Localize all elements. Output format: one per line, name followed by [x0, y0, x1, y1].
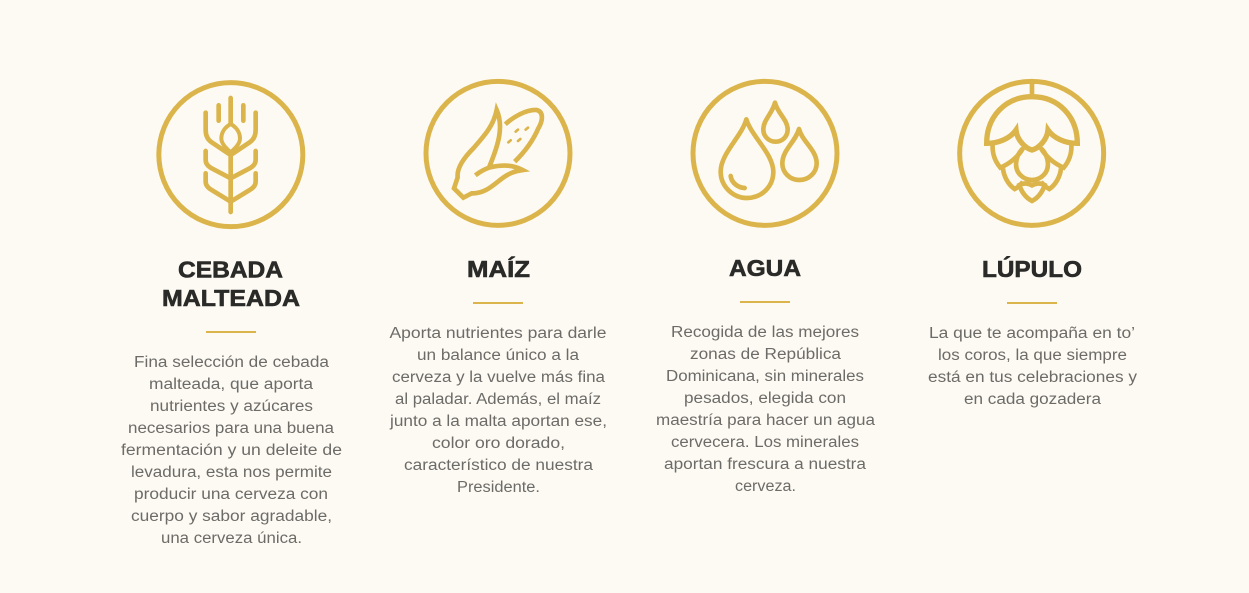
text block: cebada description: cuerpo y sabor agradable, [131, 508, 332, 525]
text block: cebada description: producir una cerveza con [134, 486, 328, 503]
panel: lupulo [928, 81, 1137, 408]
text block: agua description: cervecera. Los minerales [671, 434, 859, 451]
text block: cebada description: Fina selección de cebada [134, 354, 329, 371]
text block: lupulo description: está en tus celebraciones y [928, 369, 1137, 386]
text block: maiz description: al paladar. Además, el maíz [395, 391, 601, 408]
text block: agua description: aportan frescura a nuestra [664, 456, 866, 473]
heading: maiz: MAÍZ [467, 255, 530, 282]
icon: hop [960, 81, 1104, 225]
text block: agua description: Dominicana, sin minerales [666, 368, 864, 385]
text block: cebada description: nutrientes y azúcares [150, 398, 313, 415]
text block: cebada description: una cerveza única. [161, 530, 302, 547]
icon: water drops [693, 81, 837, 225]
panel: cebada malteada [121, 83, 342, 547]
text block: lupulo description: los coros, la que siempre [938, 347, 1127, 364]
panel: maiz [389, 81, 607, 496]
text block: maiz description: un balance único a la [417, 347, 579, 364]
text block: maiz description: Aporta nutrientes para darle [390, 325, 606, 342]
heading: cebada malteada: MALTEADA [162, 285, 300, 311]
text block: agua description: Recogida de las mejores [671, 324, 859, 341]
text block: maiz description: característico de nuestra [404, 457, 593, 474]
text block: maiz description: Presidente. [457, 479, 540, 496]
panel: agua [656, 81, 875, 495]
text block: maiz description: cerveza y la vuelve más fina [392, 369, 605, 386]
heading rule [1007, 302, 1057, 304]
text block: maiz description: junto a la malta aportan ese, [389, 413, 607, 430]
heading rule [473, 302, 523, 304]
icon: wheat [159, 83, 303, 227]
text block: cebada description: necesarios para una buena [128, 420, 334, 437]
text block: cebada description: levadura, esta nos permite [131, 464, 332, 481]
text block: lupulo description: en cada gozadera [964, 391, 1101, 408]
text block: maiz description: color oro dorado, [432, 435, 565, 452]
text block: agua description: pesados, elegida con [684, 390, 846, 407]
heading: lupulo: LÚPULO [982, 255, 1082, 282]
heading: cebada malteada [162, 256, 300, 311]
text block: lupulo description: La que te acompaña en to’ [929, 325, 1135, 342]
text block: lupulo description [928, 325, 1137, 408]
text block: agua description: zonas de República [690, 346, 841, 363]
heading: cebada malteada: CEBADA [178, 256, 283, 282]
text block: cebada description: fermentación y un deleite de [121, 442, 342, 459]
text block: cebada description: malteada, que aporta [149, 376, 313, 393]
heading rule [740, 301, 790, 303]
text block: agua description: cerveza. [735, 478, 796, 495]
heading: agua: AGUA [729, 255, 801, 281]
text block: agua description [656, 324, 875, 495]
icon: corn [426, 81, 570, 225]
text block: maiz description [389, 325, 607, 496]
text block: cebada description [121, 354, 342, 547]
text block: agua description: maestría para hacer un agua [656, 412, 875, 429]
heading rule [206, 331, 256, 333]
